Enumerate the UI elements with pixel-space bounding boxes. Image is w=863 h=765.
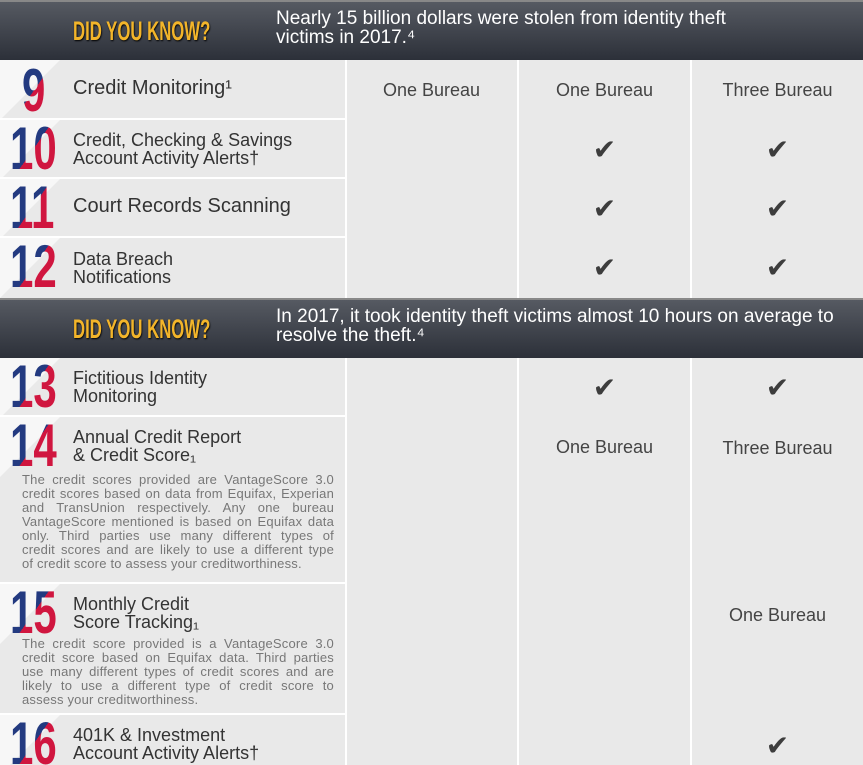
text: ✔ [766,372,789,403]
row 15 [0,584,345,713]
text: ✔ [593,193,616,224]
row 13: Monitoring [73,386,157,406]
row 12: Notifications [73,267,171,287]
text: One Bureau [729,605,826,625]
row 15: credit score based on Equifax data. Third parties [22,650,334,665]
row 14: credit scores based on data from Equifax, Experian [22,486,334,501]
row 15: assess your creditworthiness. [22,692,198,707]
banner 2 [0,298,863,358]
values section 2: ✔ [593,372,616,403]
row 16: Account Activity Alerts† [73,743,259,763]
row 12 [0,238,345,298]
row 14: credit scores and are likely to use a different type [22,542,334,557]
row 10: Account Activity Alerts† [73,148,259,168]
column backgrounds [347,60,517,298]
row 13: Fictitious Identity [73,368,207,388]
banner 2: DID YOU KNOW? [73,314,210,344]
row 11 [0,179,345,236]
row 14: only. Third parties use many different types of [22,528,334,543]
banner 1: Nearly 15 billion dollars were stolen from identity theft victims in 2017.⁴ [276,8,726,48]
row 10: Credit, Checking & Savings [73,130,292,150]
row 11: Court Records Scanning [73,195,291,217]
row 15: likely to use a different type of credit score to [22,678,334,693]
row 15: Score Tracking₁ [73,612,199,632]
banner 1 [0,0,863,60]
text: ✔ [593,252,616,283]
row 14 [0,417,345,582]
row 9 [0,60,345,118]
text: ✔ [766,134,789,165]
row 13 [0,358,345,415]
row 14: and TransUnion respectively. Any one bureau [22,500,334,515]
text: Three Bureau [722,438,833,458]
text: ✔ [766,252,789,283]
banner 1: DID YOU KNOW? [73,16,210,46]
row 9: Credit Monitoring¹ [73,77,232,99]
row 15: use many different types of credit scores and are [22,664,334,679]
row 15: Monthly Credit [73,594,189,614]
row 12: Data Breach [73,249,173,269]
values section 1: One Bureau [383,80,480,100]
row 14: Annual Credit Report [73,427,241,447]
row 10 [0,120,345,177]
banner 2: In 2017, it took identity theft victims almost 10 hours on average to resolve the theft.⁴ [276,306,834,346]
text: Three Bureau [722,80,833,100]
row 16 [0,715,345,765]
row 16: 401K & Investment [73,725,225,745]
row 14: of credit score to assess your creditworthiness. [22,556,302,571]
row 14: VantageScore mentioned is based on Equifax data [22,514,334,529]
row 15: The credit score provided is a VantageScore 3.0 [22,636,334,651]
text: ✔ [766,730,789,761]
text: One Bureau [556,80,653,100]
row 14: The credit scores provided are VantageScore 3.0 [22,472,334,487]
text: One Bureau [556,437,653,457]
row 14: & Credit Score₁ [73,445,196,465]
text: ✔ [593,134,616,165]
text: ✔ [766,193,789,224]
